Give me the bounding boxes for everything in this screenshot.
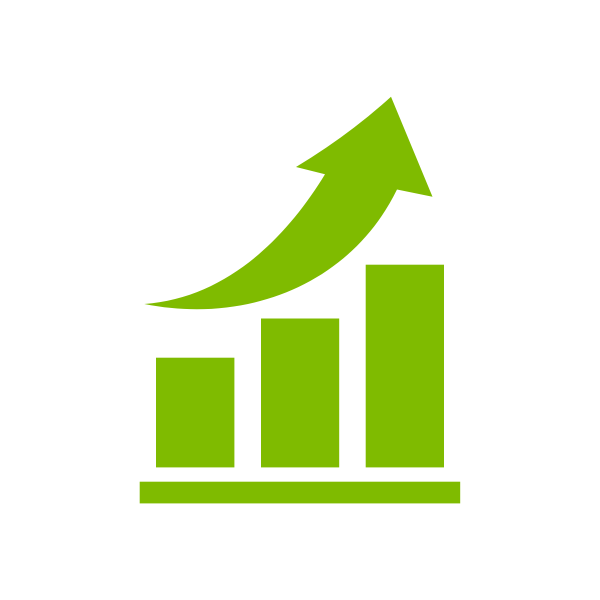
bar 3 xyxy=(366,265,444,467)
rising arrow xyxy=(144,97,433,309)
bar 1 xyxy=(156,358,234,467)
bar 2 xyxy=(261,318,339,467)
baseline xyxy=(140,482,460,503)
